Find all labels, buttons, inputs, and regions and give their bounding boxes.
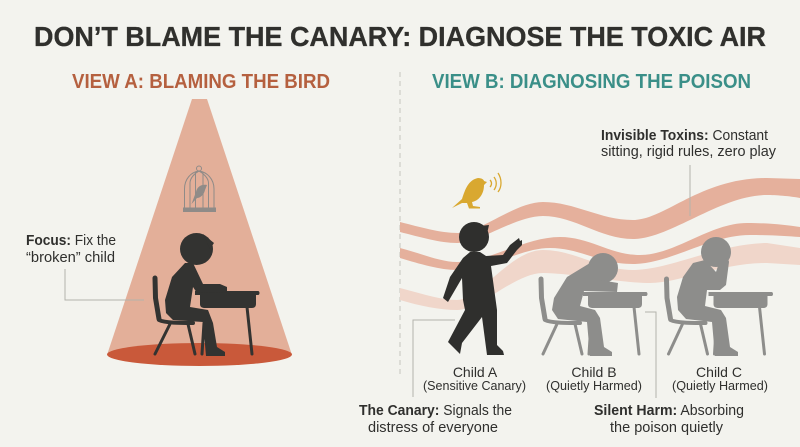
callout: invisible toxins: Invisible Toxins: Constant bbox=[601, 128, 768, 144]
callout: focus: Focus: Fix the bbox=[26, 233, 116, 249]
child C head-in-hands silhouette bbox=[666, 237, 773, 356]
label: child C: (Quietly Harmed) bbox=[672, 379, 768, 393]
spotlight floor ellipse bbox=[107, 343, 292, 366]
callout: invisible toxins bbox=[601, 128, 777, 216]
callout: the canary bbox=[359, 320, 512, 436]
child B slumped silhouette bbox=[541, 253, 648, 356]
toxic air waves bbox=[400, 178, 800, 310]
icon: canary with sound waves bbox=[452, 173, 501, 208]
icon: caged bird bbox=[183, 166, 216, 212]
child A standing silhouette bbox=[443, 222, 522, 355]
callout: invisible toxins: sitting, rigid rules, zero play bbox=[601, 144, 777, 160]
label: child B: (Quietly Harmed) bbox=[546, 379, 642, 393]
label: child C: Child C bbox=[696, 364, 742, 380]
label: child A bbox=[423, 364, 526, 393]
label: child C bbox=[672, 364, 768, 393]
callout: focus: “broken” child bbox=[26, 250, 115, 266]
callout: silent harm: the poison quietly bbox=[610, 420, 724, 436]
callout: focus bbox=[26, 233, 144, 300]
callout: the canary: The Canary: Signals the bbox=[359, 403, 512, 419]
callout: the canary: distress of everyone bbox=[368, 420, 498, 436]
title: DON’T BLAME THE CANARY: DIAGNOSE THE TOXIC AIR bbox=[34, 21, 766, 52]
panel: view A bbox=[26, 71, 330, 366]
label: child B bbox=[546, 364, 642, 393]
callout: silent harm: Silent Harm: Absorbing bbox=[594, 403, 744, 419]
child silhouette at desk bbox=[155, 233, 260, 356]
label: child A: (Sensitive Canary) bbox=[423, 379, 526, 393]
spotlight cone bbox=[107, 99, 292, 355]
callout: silent harm bbox=[594, 312, 744, 436]
heading: view B: VIEW B: DIAGNOSING THE POISON bbox=[432, 71, 751, 93]
heading: view A: VIEW A: BLAMING THE BIRD bbox=[72, 71, 330, 93]
panel: view B bbox=[359, 71, 800, 436]
label: child B: Child B bbox=[571, 364, 617, 380]
label: child A: Child A bbox=[453, 364, 498, 380]
